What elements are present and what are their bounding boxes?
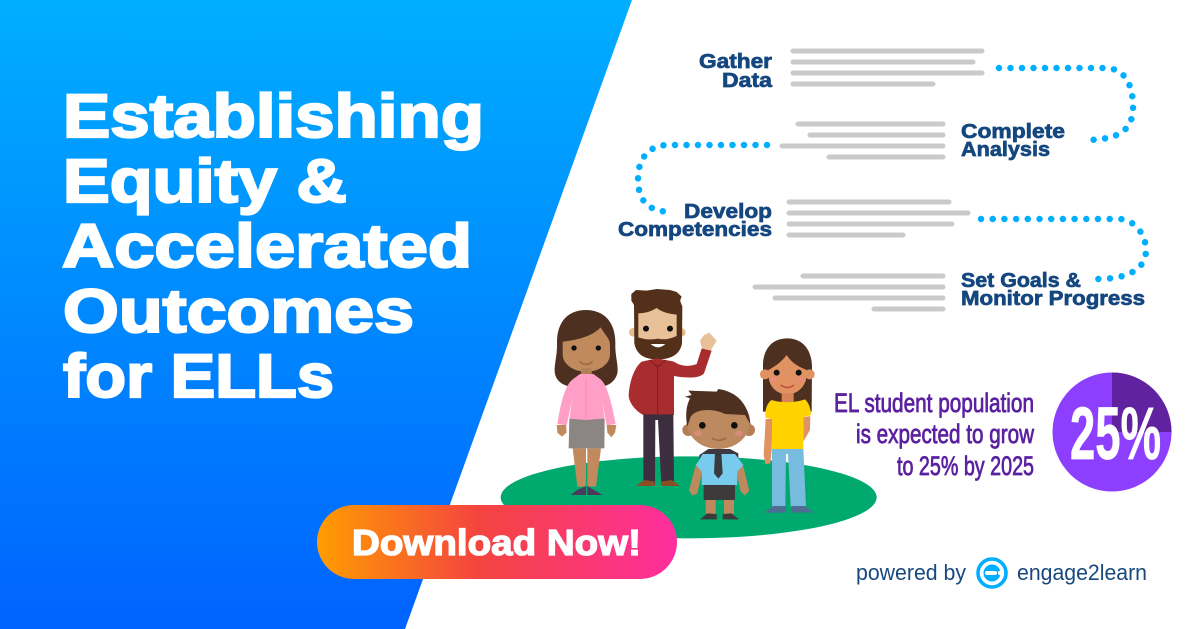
step 2: Complete Analysis: Analysis bbox=[961, 139, 1050, 161]
title: Equity & bbox=[63, 147, 347, 215]
step 4: Set Goals and Monitor Progress: Monitor Progress bbox=[961, 288, 1145, 310]
person: girl in yellow shirt bbox=[760, 338, 815, 513]
person: boy with backpack bbox=[682, 389, 755, 519]
step 1: Gather Data: Data bbox=[722, 70, 773, 92]
title: Accelerated bbox=[62, 212, 472, 280]
logo: powered by engage2learn: powered by bbox=[856, 560, 966, 585]
step 3: Develop Competencies bbox=[618, 201, 968, 241]
button: Download Now: Download Now! bbox=[352, 522, 641, 563]
connector: dotted path step 1 to 2 bbox=[999, 68, 1133, 140]
pie chart: 25 percent bbox=[1052, 372, 1172, 492]
text block: EL student population: to 25% by 2025 bbox=[897, 451, 1034, 481]
person: bearded man in red shirt bbox=[629, 289, 717, 486]
step 2: Complete Analysis: Complete bbox=[961, 121, 1065, 143]
step 1: Gather Data bbox=[699, 51, 982, 92]
connector: dotted path step 3 to 4 bbox=[981, 219, 1146, 279]
logo: powered by engage2learn bbox=[856, 559, 1147, 587]
step 1: Gather Data: Gather bbox=[699, 51, 772, 73]
logo: powered by engage2learn: engage2learn bbox=[1017, 560, 1147, 585]
step 2: Complete Analysis bbox=[782, 121, 1065, 161]
text block: EL student population bbox=[834, 388, 1034, 481]
title bbox=[62, 82, 484, 410]
connector: dotted path step 2 to 3 bbox=[638, 145, 767, 212]
step 3: Develop Competencies: Competencies bbox=[618, 219, 772, 241]
button: Download Now bbox=[317, 505, 677, 579]
illustration: group of people on green ellipse bbox=[501, 289, 877, 538]
step 4: Set Goals and Monitor Progress: Set Goals & bbox=[961, 270, 1081, 292]
panel: blue diagonal background bbox=[0, 0, 632, 629]
title: Outcomes bbox=[63, 277, 414, 345]
step 4: Set Goals and Monitor Progress bbox=[755, 270, 1145, 310]
title: Establishing bbox=[63, 82, 484, 150]
title: for ELLs bbox=[63, 342, 334, 410]
text block: EL student population: EL student population bbox=[834, 388, 1034, 418]
step 3: Develop Competencies: Develop bbox=[684, 201, 772, 223]
icon: engage2learn mark bbox=[978, 559, 1006, 587]
text block: EL student population: is expected to grow bbox=[856, 419, 1034, 449]
green ground ellipse bbox=[501, 456, 877, 538]
person: woman in pink blouse bbox=[555, 310, 618, 495]
